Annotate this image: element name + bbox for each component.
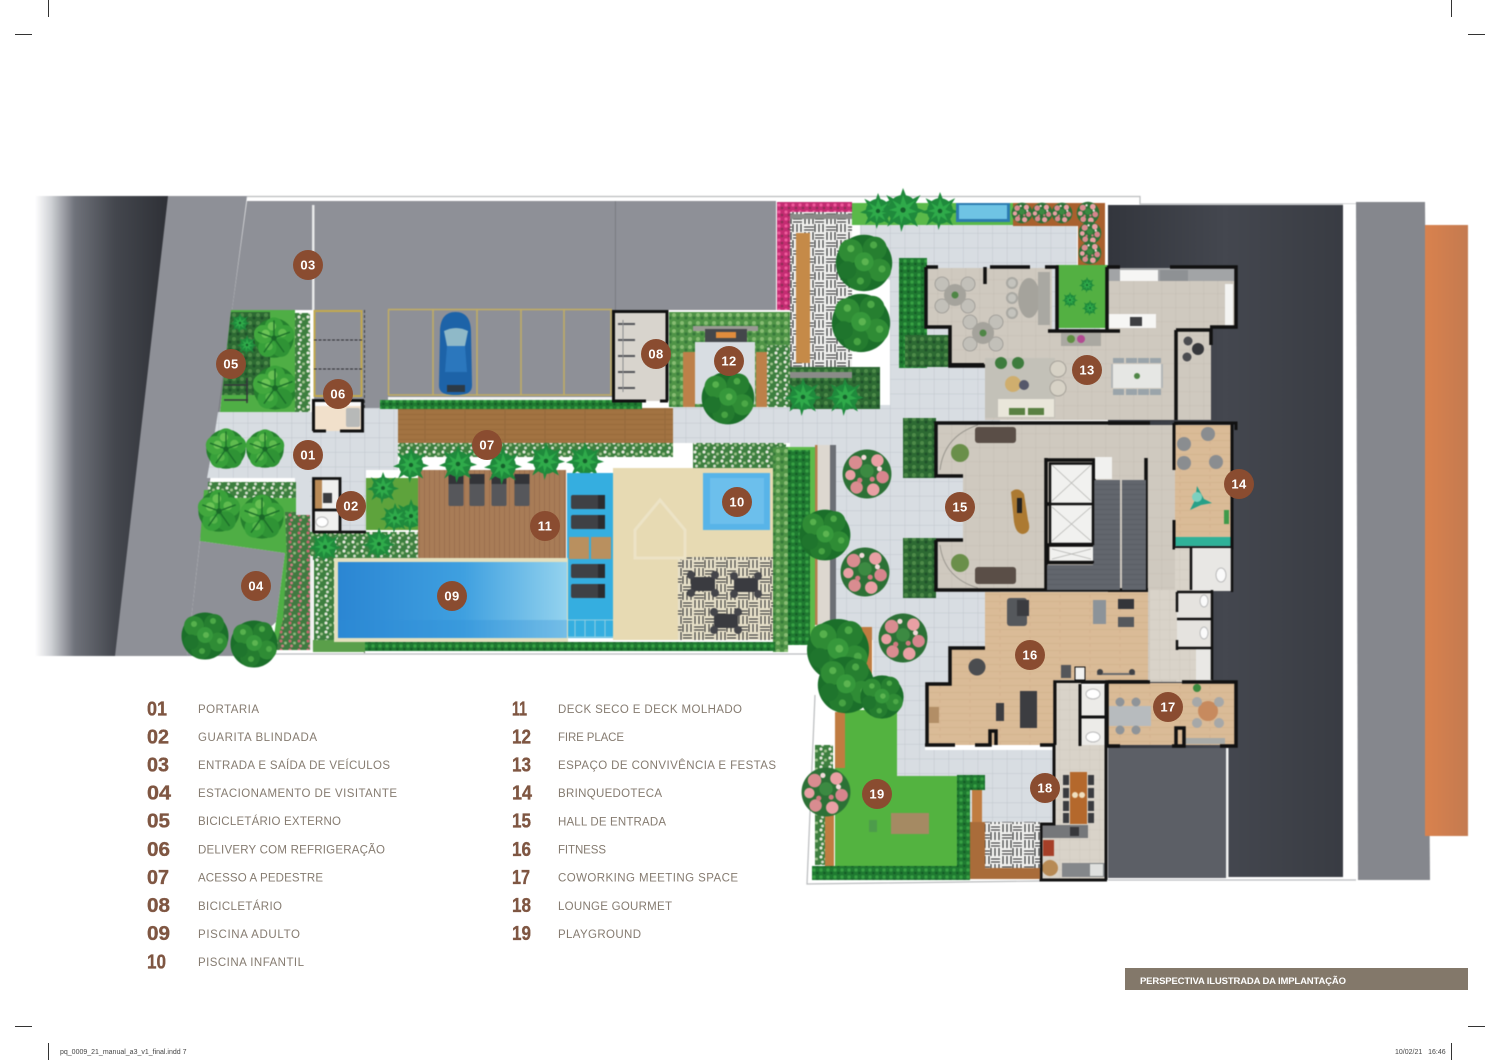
marker 03	[293, 250, 323, 280]
pool 09: adult pool	[334, 558, 568, 642]
legend column 2: 11	[512, 698, 527, 720]
garden 05: external bike rack	[220, 310, 310, 412]
lounge furniture	[935, 272, 1101, 418]
marker 19: 19	[869, 786, 885, 802]
marker 10: 10	[729, 494, 745, 510]
gym equipment	[929, 598, 1135, 728]
legend column 2: 14	[512, 782, 533, 804]
marker 09: 09	[444, 588, 460, 604]
legend column 1: PISCINA ADULTO	[198, 929, 300, 941]
legend column 1: PISCINA INFANTIL	[198, 957, 305, 969]
visitor parking pad 04	[187, 541, 285, 656]
marker 03: 03	[300, 258, 316, 272]
wet deck	[567, 473, 617, 638]
sand deck	[613, 468, 775, 640]
gardens 04: visitor parking	[182, 428, 310, 668]
marker 15: 15	[952, 500, 968, 514]
legend column 1: 01	[147, 698, 167, 720]
map markers	[216, 250, 1254, 809]
legend column 1	[147, 698, 397, 974]
left street and sidewalk	[35, 196, 247, 656]
marker 06: 06	[330, 386, 346, 402]
legend column 2: BRINQUEDOTECA	[558, 788, 662, 800]
marker 08	[641, 339, 671, 369]
marker 11: 11	[538, 518, 552, 534]
legend column 2: 15	[512, 810, 531, 832]
amenity 14: kids room	[1174, 423, 1236, 548]
walls	[936, 423, 1176, 590]
legend column 2: FIRE PLACE	[558, 732, 624, 744]
legend column 1: ESTACIONAMENTO DE VISITANTE	[198, 788, 397, 800]
legend column 2	[512, 698, 776, 945]
legend column 1: 06	[147, 839, 170, 861]
amenity 16: fitness	[925, 592, 1148, 745]
legend column 1: 09	[147, 923, 170, 945]
legend column 1: 04	[147, 782, 172, 804]
legend column 1: 02	[147, 726, 169, 748]
marker 04: 04	[248, 578, 264, 594]
print slug: date: 10/02/21 16:46	[1395, 1049, 1446, 1056]
shrubs by playground	[807, 619, 904, 719]
legend column 2: COWORKING MEETING SPACE	[558, 872, 738, 884]
legend column 2: 12	[512, 726, 531, 748]
terrace table	[1182, 336, 1204, 362]
car	[439, 312, 472, 395]
legend column 1: 05	[147, 810, 170, 832]
marker 12: 12	[721, 354, 737, 368]
pool 10: children's pool	[703, 473, 770, 530]
kitchen	[1108, 268, 1235, 328]
legend column 2: DECK SECO E DECK MOLHADO	[558, 704, 742, 716]
pergola with outdoor tables	[678, 557, 773, 640]
marker 12	[714, 346, 744, 376]
legend column 1: 10	[147, 952, 166, 974]
marker 02	[336, 491, 366, 521]
marker 09	[437, 581, 467, 611]
site boundary lines	[187, 196, 1425, 884]
paving	[207, 225, 1100, 822]
marker 17: 17	[1160, 700, 1176, 714]
legend column 2: 18	[512, 895, 531, 917]
walls	[926, 267, 1236, 420]
marker 05	[216, 349, 246, 379]
marker 08: 08	[648, 346, 664, 362]
marker 14: 14	[1231, 476, 1247, 492]
dining table	[1111, 358, 1163, 395]
pergola by lounge	[970, 822, 1040, 879]
hedges along west side	[899, 258, 950, 598]
playground 19	[802, 710, 985, 880]
caption bar: PERSPECTIVA ILUSTRADA DA IMPLANTAÇÃO	[1140, 976, 1346, 987]
legend column 2: 17	[512, 867, 530, 889]
parking bays and car	[296, 310, 612, 655]
plan artwork	[35, 188, 1468, 884]
building 08: bike room	[612, 310, 668, 401]
marker 14	[1224, 469, 1254, 499]
marker 07	[472, 430, 502, 460]
marker 17	[1153, 692, 1183, 722]
legend column 1: PORTARIA	[198, 704, 259, 716]
marker 18	[1030, 773, 1060, 803]
marker 02: 02	[343, 498, 359, 514]
marker 16	[1015, 640, 1045, 670]
amenity 18: lounge gourmet	[1040, 682, 1107, 880]
legend column 1: ENTRADA E SAÍDA DE VEÍCULOS	[198, 759, 390, 772]
legend column 2: 13	[512, 754, 531, 776]
marker 05: 05	[223, 356, 239, 372]
marker 10	[722, 487, 752, 517]
bathrooms block	[1150, 548, 1233, 682]
legend column 2: 16	[512, 839, 531, 861]
garden beds around the guardhouse	[308, 472, 428, 652]
print slug: file name: pq_0009_21_manual_a3_v1_final.indd 7	[60, 1049, 187, 1056]
legend column 1: 03	[147, 754, 169, 776]
building 02: guardhouse	[313, 477, 366, 532]
legend column 1: BICICLETÁRIO	[198, 900, 282, 913]
legend column 2: HALL DE ENTRADA	[558, 816, 666, 828]
marker 18: 18	[1037, 780, 1053, 796]
deck 11	[393, 442, 604, 562]
legend column 2: PLAYGROUND	[558, 929, 641, 941]
fire place garden 12	[669, 312, 790, 424]
elevators and stairs	[1046, 457, 1146, 590]
planter	[1056, 265, 1107, 328]
rose shrubs	[841, 450, 927, 662]
legend column 1: DELIVERY COM REFRIGERAÇÃO	[198, 844, 385, 856]
marker 06	[323, 379, 353, 409]
marker 16: 16	[1022, 648, 1038, 662]
legend column 2: ESPAÇO DE CONVIVÊNCIA E FESTAS	[558, 759, 776, 772]
marker 01	[293, 440, 323, 470]
right street	[1108, 202, 1468, 880]
amenity 17: coworking	[1107, 682, 1236, 746]
driveway: vehicle entrance	[232, 201, 776, 410]
top garden with fountain	[852, 188, 1105, 265]
faint watermark house	[635, 500, 685, 558]
legend column 2: 19	[512, 923, 531, 945]
marker 11	[530, 511, 560, 541]
site plan	[35, 188, 1468, 884]
legend column 1: BICICLETÁRIO EXTERNO	[198, 815, 341, 828]
legend column 1: GUARITA BLINDADA	[198, 732, 317, 744]
marker 19	[862, 779, 892, 809]
marker 01: 01	[300, 448, 316, 462]
caption bar	[1125, 968, 1468, 990]
marker 07: 07	[479, 438, 495, 452]
amenity 13: party and convivial area	[926, 265, 1236, 420]
hedges beside pool deck	[365, 445, 850, 652]
amenity 15: entrance hall	[936, 423, 1176, 682]
legend column 2: LOUNGE GOURMET	[558, 901, 672, 913]
parking under coworking	[1108, 748, 1228, 878]
legend column 2: FITNESS	[558, 844, 606, 856]
legend column 1: 08	[147, 895, 170, 917]
marker 15	[945, 492, 975, 522]
marker 04	[241, 571, 271, 601]
legend column 1: 07	[147, 867, 169, 889]
marker 13	[1072, 355, 1102, 385]
marker 13: 13	[1079, 362, 1095, 378]
pink bed and pergola	[777, 202, 892, 416]
legend column 1: ACESSO A PEDESTRE	[198, 872, 323, 884]
building 06: delivery	[312, 399, 364, 431]
walkway 07: pedestrian access	[380, 400, 786, 468]
